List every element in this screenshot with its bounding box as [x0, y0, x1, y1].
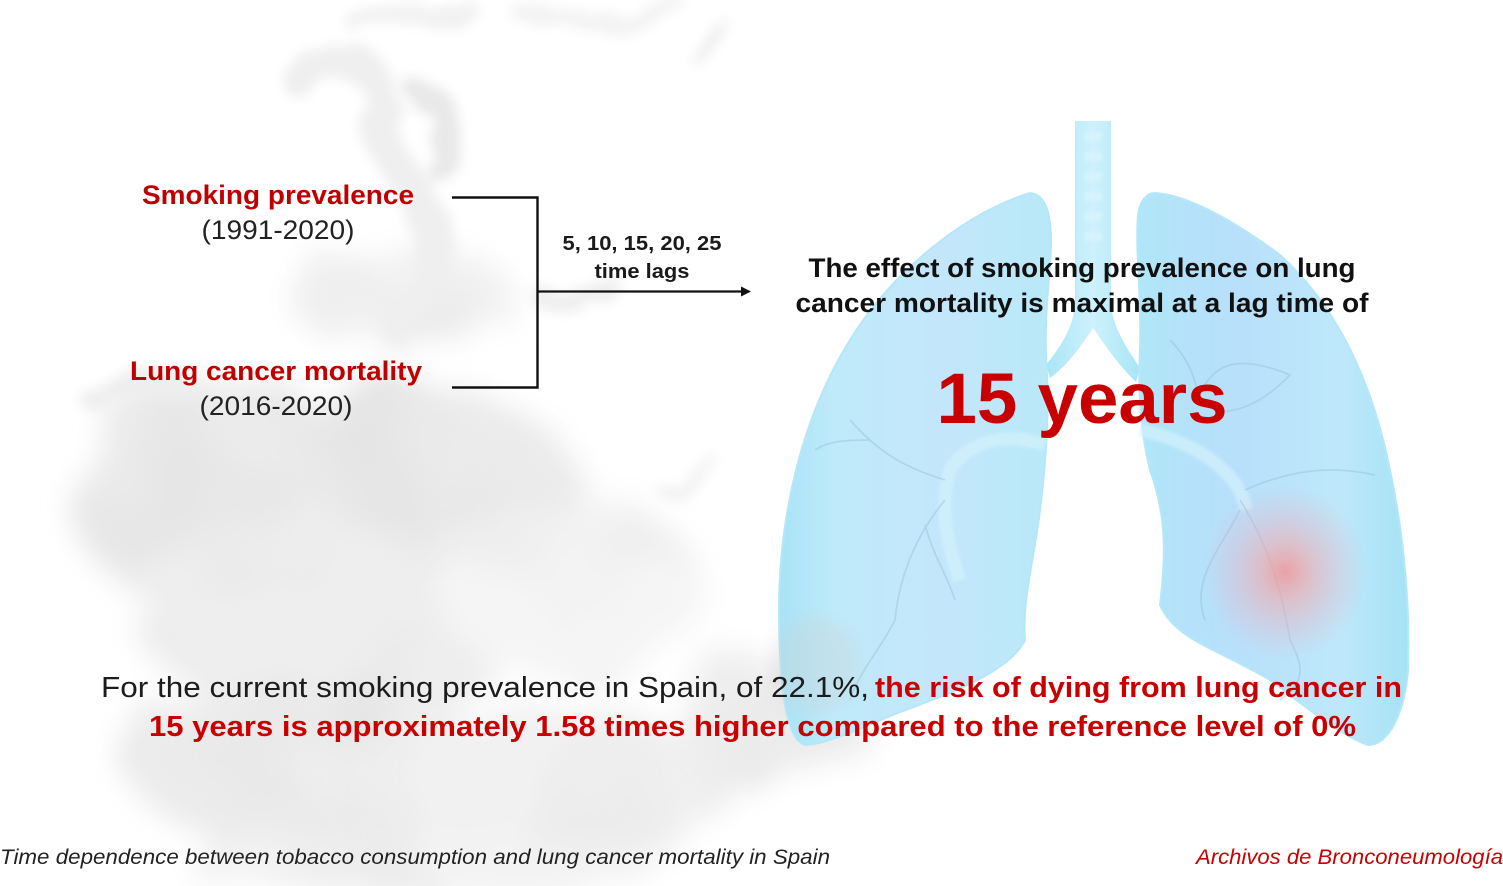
- key result: 15 years: 15 years: [936, 360, 1228, 439]
- input: smoking prevalence: (1991-2020): [202, 215, 354, 245]
- conclusion text: [101, 672, 1402, 743]
- time lags label: time lags: [594, 261, 690, 283]
- tumour highlight: [1203, 484, 1367, 660]
- time lags label: 5, 10, 15, 20, 25: [562, 233, 722, 255]
- time lags label: [562, 233, 722, 283]
- left lung: [779, 193, 1051, 745]
- background: smoke cloud: [75, 8, 865, 886]
- input: smoking prevalence: [142, 180, 414, 245]
- statement: maximal effect: The effect of smoking prevalence on lung: [808, 253, 1356, 283]
- footer: journal name: Archivos de Bronconeumología: [1194, 846, 1503, 869]
- input: lung cancer mortality: (2016-2020): [200, 391, 352, 421]
- input: lung cancer mortality: Lung cancer mortality: [130, 356, 422, 386]
- bracket connector: [452, 198, 538, 388]
- trachea: [1046, 121, 1140, 382]
- conclusion text: 15 years is approximately 1.58 times higher compared to the reference level of 0%: [149, 711, 1356, 743]
- input: smoking prevalence: Smoking prevalence: [142, 180, 414, 210]
- statement: maximal effect: cancer mortality is maximal at a lag time of: [796, 288, 1369, 318]
- right lung: [1137, 193, 1408, 745]
- input: lung cancer mortality: [130, 356, 422, 421]
- statement: maximal effect: [796, 253, 1369, 318]
- conclusion text: For the current smoking prevalence in Spain, of 22.1%,: [101, 672, 869, 704]
- arrow: [537, 286, 751, 296]
- smoke overlap at lung base: [770, 617, 860, 713]
- conclusion text: the risk of dying from lung cancer in: [875, 672, 1402, 704]
- footer: article title: Time dependence between tobacco consumption and lung cancer mortality in Spain: [0, 846, 830, 869]
- icon: lungs: [770, 121, 1408, 745]
